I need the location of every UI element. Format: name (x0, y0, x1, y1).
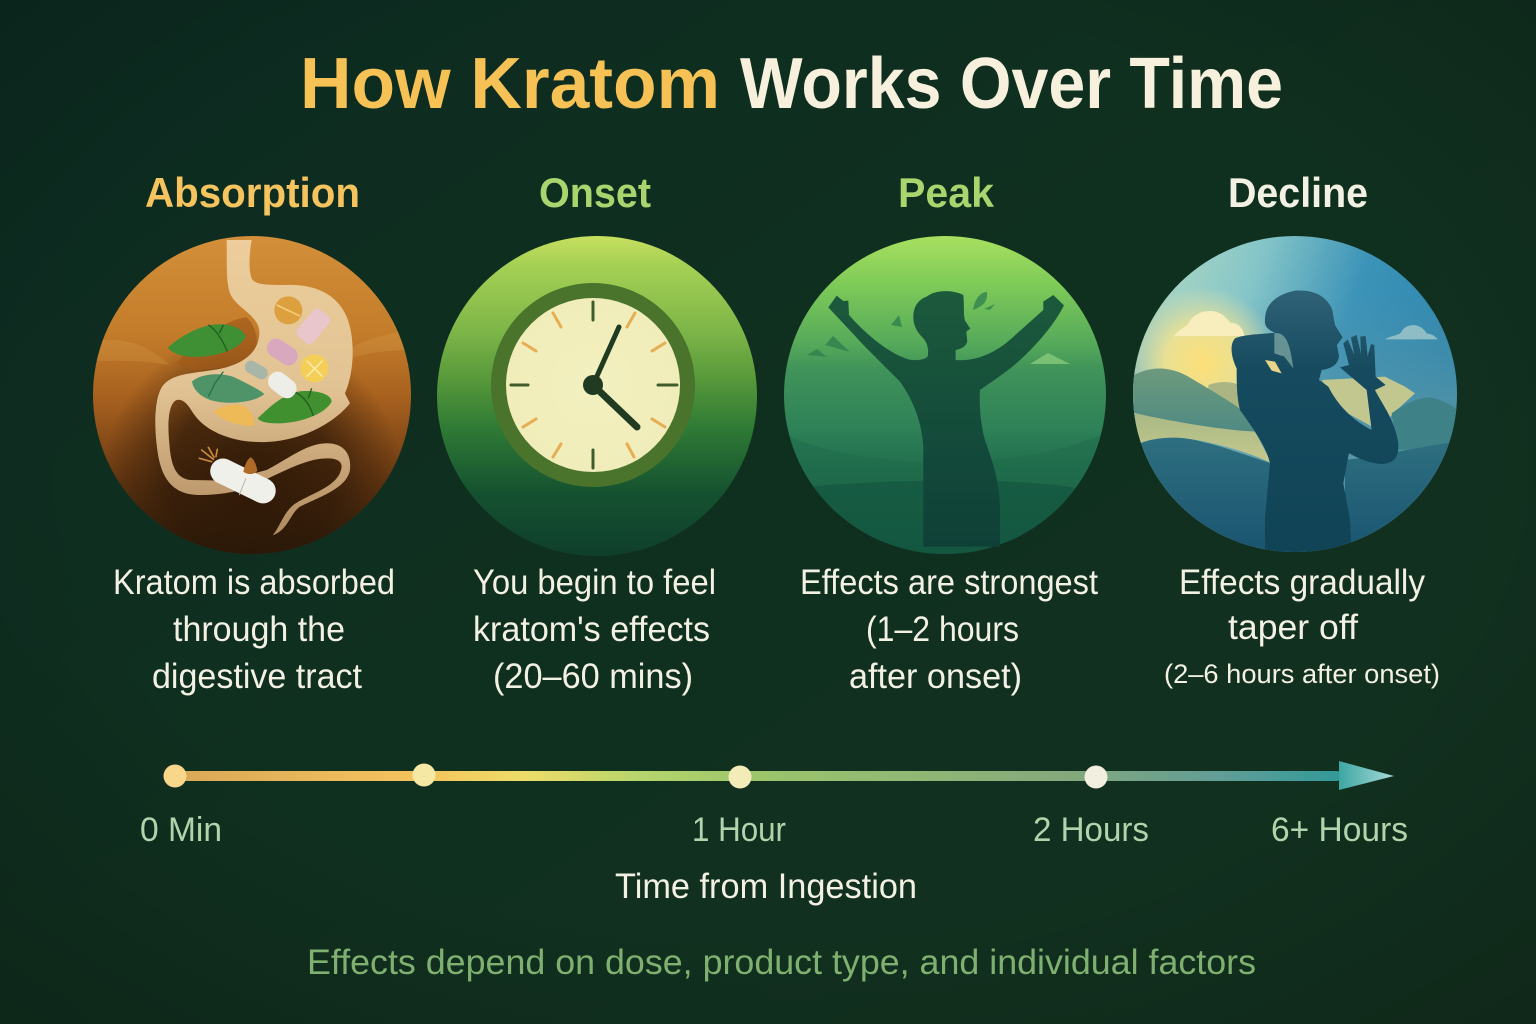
leaf: lower (258, 391, 332, 423)
axis title: Time from Ingestion (615, 867, 917, 906)
capsule (199, 447, 280, 508)
text: onset: kratom's effects (473, 610, 710, 649)
stomach and intestine (155, 240, 353, 535)
illustration: person with raised arms (775, 236, 1115, 570)
timeline labels: 6+ Hours (1271, 811, 1408, 849)
heading: absorption: Absorption (145, 169, 360, 216)
text: absorption: Kratom is absorbed (113, 563, 395, 602)
cloud: left (1174, 311, 1244, 336)
text: peak (800, 563, 1098, 696)
dot: 0 min (164, 764, 186, 788)
illustration: clock (437, 236, 757, 556)
text: decline: taper off (1228, 608, 1358, 647)
shadow bay beside stomach (177, 317, 257, 370)
arrow head (1339, 761, 1394, 790)
panel: onset (437, 169, 757, 696)
text: absorption (113, 563, 395, 696)
panel: peak (775, 169, 1115, 696)
silhouette (1232, 290, 1398, 557)
leaf: upper (168, 324, 246, 357)
footer note: Effects depend on dose, product type, and individual factors (307, 943, 1256, 982)
dot: 1 hour (728, 766, 752, 788)
text: peak: (1–2 hours (866, 610, 1019, 649)
cloud: right (1385, 325, 1438, 339)
text: onset: You begin to feel (473, 563, 716, 602)
illustration: person at sunset landscape (1125, 230, 1465, 560)
heading: decline: Decline (1228, 169, 1368, 216)
title (300, 44, 1283, 124)
timeline labels (140, 811, 1408, 849)
leaf: yellow (213, 405, 254, 426)
text: onset: (20–60 mins) (493, 657, 693, 696)
text: peak: Effects are strongest (800, 563, 1098, 602)
leaf: teal (192, 374, 264, 403)
text: onset (473, 563, 716, 696)
illustration: digestive tract (93, 236, 411, 554)
text: absorption: digestive tract (152, 657, 362, 696)
text: absorption: through the (173, 610, 345, 649)
dot: 2 hours (1084, 766, 1108, 788)
heading: peak: Peak (898, 169, 995, 216)
timeline labels: 2 Hours (1033, 811, 1149, 849)
text: decline (1164, 563, 1440, 689)
text: decline: Effects gradually (1179, 563, 1425, 602)
text: decline: (2–6 hours after onset) (1164, 659, 1440, 689)
panel: absorption (80, 169, 415, 696)
silhouette (828, 291, 1064, 547)
timeline labels: 0 Min (140, 811, 222, 849)
title: How Kratom (300, 44, 720, 124)
hills (1208, 382, 1258, 430)
timeline bar (175, 771, 1342, 781)
pills (274, 296, 302, 324)
text: peak: after onset) (849, 657, 1022, 696)
panel: decline (1125, 169, 1465, 689)
timeline (140, 761, 1408, 906)
heading: onset: Onset (539, 169, 651, 216)
timeline labels: 1 Hour (692, 811, 786, 849)
title: Works Over Time (740, 44, 1283, 124)
dot: absorption (412, 764, 436, 786)
